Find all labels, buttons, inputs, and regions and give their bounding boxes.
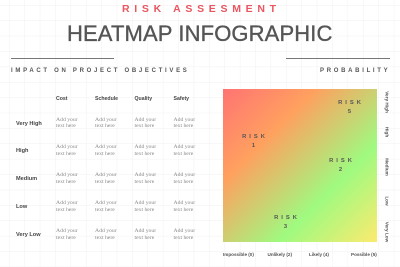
y axis: medium: Medium [384, 158, 389, 176]
heading: probability: PROBABILITY [320, 68, 390, 74]
risk 2: RISK [329, 158, 355, 164]
risk 5 [338, 100, 364, 115]
row 3 cells: text here [56, 179, 76, 185]
row 5 cells: Add your [174, 228, 195, 234]
row 4 cells: text here [134, 207, 154, 213]
row 1 cells: text here [56, 123, 76, 129]
risk 1 [242, 134, 268, 149]
row 5 cells: Add your [56, 228, 78, 234]
column header: cost: Cost [56, 96, 68, 102]
row 4 cells: Add your [174, 200, 195, 206]
row 4 cells [56, 200, 196, 213]
row 2 cells: text here [134, 151, 154, 157]
row 2 cells: text here [95, 151, 115, 157]
column header: quality: Quality [134, 96, 152, 102]
row label: very high: Very High [16, 120, 42, 126]
row 2 cells: Add your [95, 144, 117, 150]
row 2 cells: Add your [56, 144, 78, 150]
row 5 cells: text here [95, 235, 115, 241]
column header: safety: Safety [174, 96, 189, 102]
row 2 cells: Add your [134, 144, 156, 150]
row 2 cells: text here [56, 151, 76, 157]
y axis: high: High [384, 127, 389, 137]
risk 1: RISK [242, 134, 268, 140]
impact table [16, 96, 196, 241]
row 3 cells: text here [174, 179, 193, 185]
risk 1: 1 [252, 143, 258, 149]
row 1 cells: text here [95, 123, 115, 129]
heading: impact: IMPACT ON PROJECT OBJECTIVES [11, 68, 190, 74]
row 4 cells: text here [56, 207, 76, 213]
left heading rule [11, 58, 114, 59]
x axis: likely: Likely (4) [309, 252, 329, 257]
row 3 cells: text here [95, 179, 115, 185]
row 5 cells: text here [56, 235, 76, 241]
row 4 cells: text here [174, 207, 193, 213]
row 5 cells: text here [174, 235, 193, 241]
row 1 cells: Add your [95, 116, 117, 122]
row 1 cells: text here [174, 123, 193, 129]
risk 2: 2 [339, 167, 345, 173]
row 1 cells: Add your [134, 116, 156, 122]
risk 3: RISK [274, 215, 300, 221]
row 1 cells [56, 116, 196, 129]
column header: schedule: Schedule [95, 96, 118, 102]
risk 3: 3 [284, 224, 290, 230]
y axis: very high: Very High [384, 91, 389, 113]
row 3 cells [56, 172, 196, 185]
right heading rule [286, 58, 390, 59]
row 1 cells: Add your [56, 116, 78, 122]
row 2 cells [56, 144, 196, 157]
x axis: impossible: Impossible (0) [223, 252, 254, 257]
x axis: unlikely: Unlikely (2) [268, 252, 292, 257]
heatmap [223, 89, 377, 242]
row label: very low: Very Low [16, 232, 41, 238]
row 5 cells: text here [134, 235, 154, 241]
row label: high: High [16, 148, 28, 154]
row 4 cells: Add your [95, 200, 117, 206]
row 5 cells [56, 228, 196, 241]
row 2 cells: Add your [174, 144, 195, 150]
row 3 cells: Add your [95, 172, 117, 178]
row label: medium: Medium [16, 176, 37, 182]
risk 3 [274, 215, 300, 230]
risk 5: RISK [338, 100, 364, 106]
y axis: very low: Very Low [384, 222, 389, 242]
row 1 cells: Add your [174, 116, 195, 122]
row 4 cells: Add your [56, 200, 78, 206]
row 5 cells: Add your [134, 228, 156, 234]
row 1 cells: text here [134, 123, 154, 129]
y axis: low: Low [384, 196, 389, 206]
title: HEATMAP INFOGRAPHIC [67, 21, 332, 46]
row label: low: Low [16, 204, 27, 210]
x axis: possible: Possible (5) [351, 252, 377, 257]
risk 2 [329, 158, 355, 173]
row 4 cells: Add your [134, 200, 156, 206]
row 3 cells: Add your [134, 172, 156, 178]
risk 5: 5 [348, 109, 354, 115]
row 3 cells: text here [134, 179, 154, 185]
row 3 cells: Add your [174, 172, 195, 178]
subtitle: RISK ASSESMENT [122, 3, 281, 15]
row 2 cells: text here [174, 151, 193, 157]
row 3 cells: Add your [56, 172, 78, 178]
row 4 cells: text here [95, 207, 115, 213]
row 5 cells: Add your [95, 228, 117, 234]
